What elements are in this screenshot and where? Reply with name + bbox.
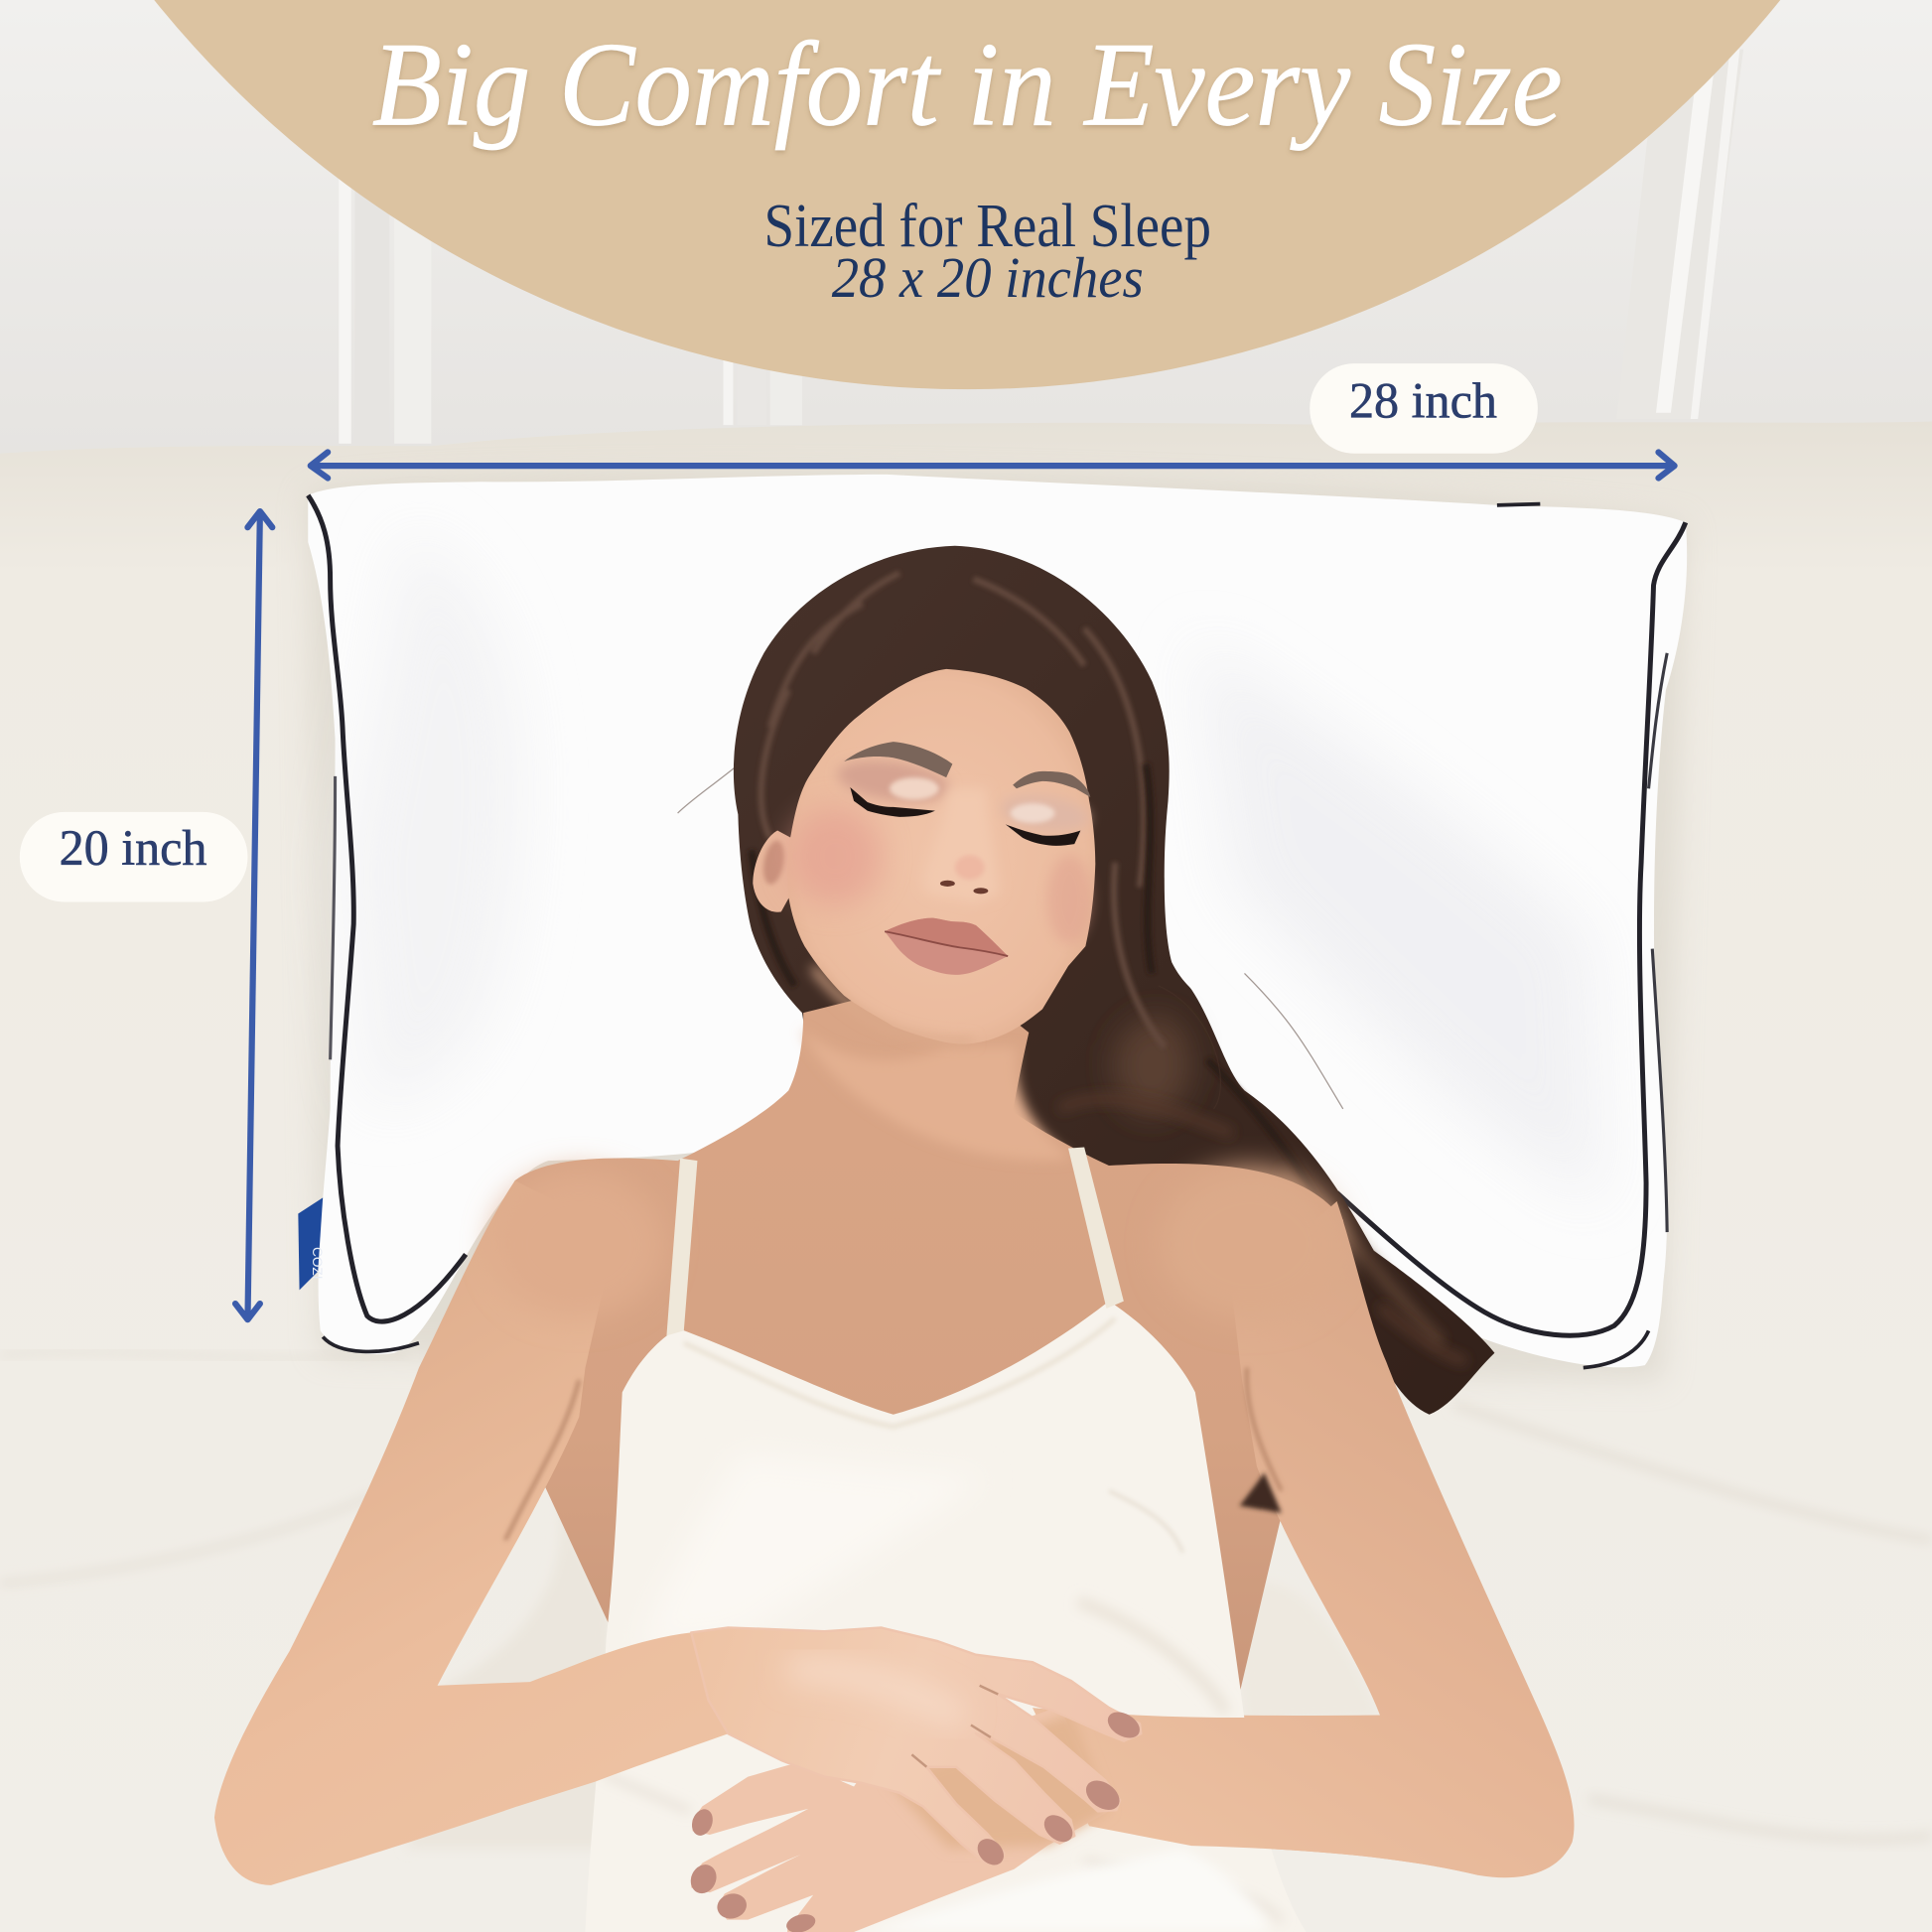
woman: ear [753,830,794,912]
woman: upper hand [691,1627,1141,1864]
pillow [308,475,1687,1368]
pillow label tag: COZI [310,1247,325,1280]
subtitle [763,193,1211,310]
woman: forearms over satin [517,1629,1478,1875]
woman: nails [686,1707,1144,1932]
lips [885,918,1008,975]
eyebrows [844,742,1090,797]
callout: 20 inch [20,812,247,901]
callout: 20 inch: 20 inch [60,821,207,877]
callout: 28 inch [1310,363,1538,454]
woman: lower hand [691,1707,1109,1932]
pillow label tag [298,1197,325,1290]
callout: 28 inch: 28 inch [1349,374,1497,430]
woman: left arm [214,1171,740,1885]
background: wall with mouldings [0,0,1932,456]
banner: top beige dome [0,0,1932,389]
woman: torso and shoulders [497,998,1344,1725]
background: bed sheets [0,421,1932,1932]
subtitle: 28 x 20 inches [832,245,1144,310]
nose [923,788,1000,903]
arrow: height dimension [235,511,272,1319]
closed eyes [850,787,1080,846]
woman: satin top [586,1147,1307,1932]
eyeshadow [834,754,1091,837]
hair [678,546,1494,1415]
arrow: width dimension [311,452,1675,479]
title: Big Comfort in Every Size [372,19,1563,151]
woman: face [787,669,1095,1043]
subtitle: Sized for Real Sleep [763,193,1211,260]
woman: right arm [1033,1169,1575,1877]
